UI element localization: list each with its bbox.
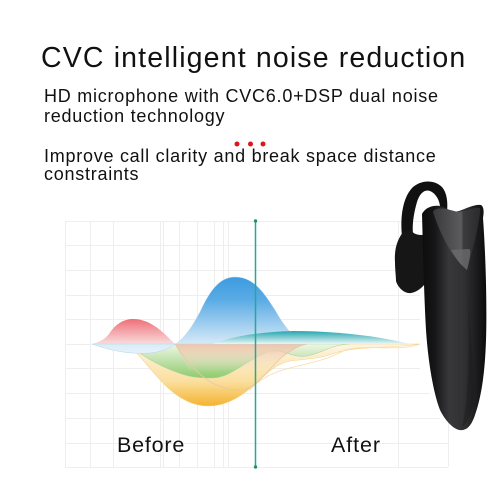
curve: red (92, 319, 175, 344)
body facet: upper triangle (433, 208, 480, 270)
ear hook (401, 181, 447, 246)
curve: green (128, 344, 350, 378)
text block: microphone description: HD microphone with CVC6.0+DSP dual noise (44, 86, 439, 106)
body facet: lower panel (451, 249, 470, 270)
curve: yellow (128, 344, 420, 406)
title: CVC intelligent noise reduction (41, 42, 466, 74)
label: Before: Before (117, 433, 185, 457)
grid lines (65, 221, 448, 468)
text block: microphone description: reduction technology (44, 106, 225, 126)
text block: call clarity description (44, 146, 436, 184)
curve: thin outlines (175, 344, 420, 390)
body facet: centre crease (462, 271, 474, 428)
text block: microphone description (44, 86, 439, 126)
curve: blue (92, 277, 307, 353)
icon: three red dots (234, 142, 266, 146)
text block: call clarity description: constraints (44, 164, 139, 184)
label: After: After (331, 433, 381, 457)
curve: peach band (175, 344, 307, 376)
earpiece body (422, 205, 486, 430)
curve: teal (213, 331, 410, 344)
ear tip (395, 230, 428, 293)
divider: green vertical line (254, 219, 257, 469)
text block: call clarity description: Improve call clarity and break space distance (44, 146, 436, 166)
